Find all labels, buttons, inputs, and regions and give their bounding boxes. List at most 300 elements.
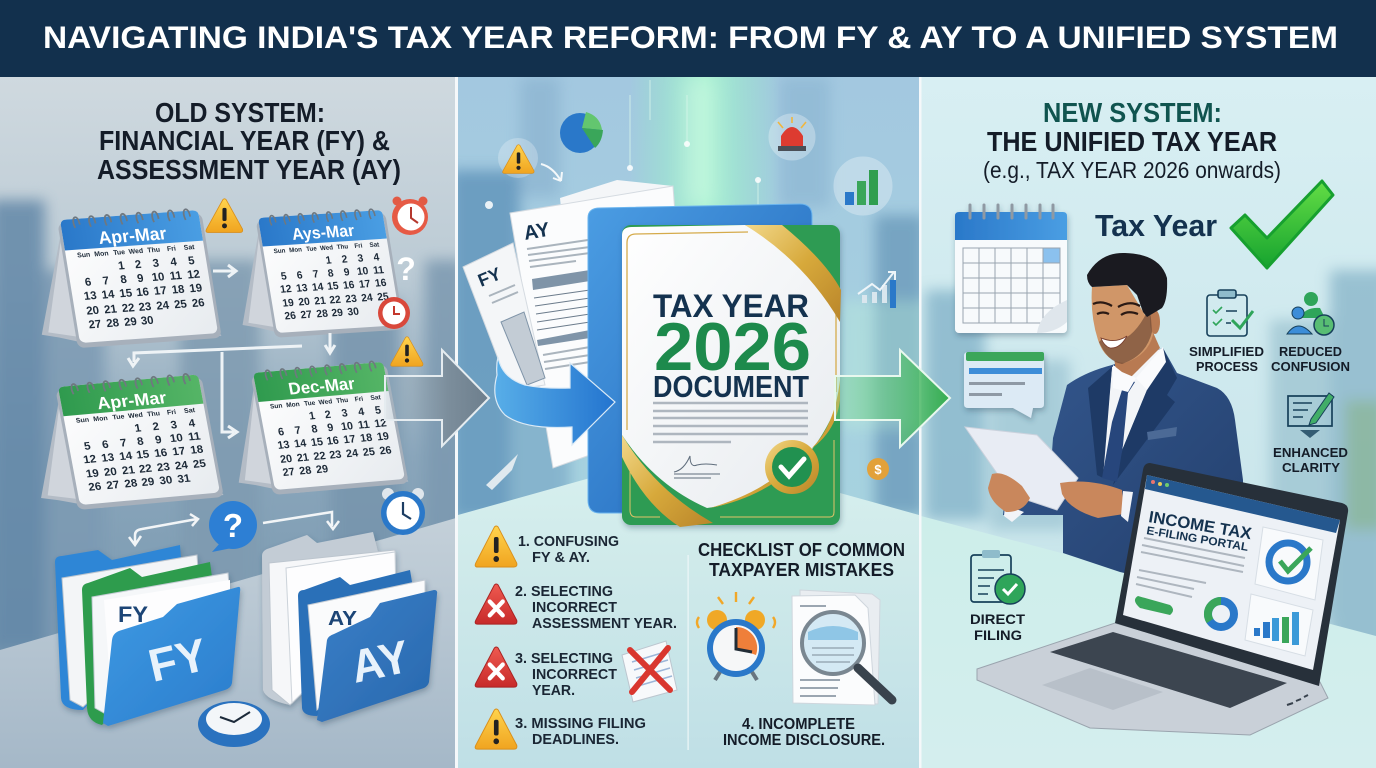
- calendar 4: Dec-Mar green: 12: [373, 417, 388, 430]
- label: reduced confusion: CONFUSION: [1271, 360, 1350, 374]
- label: enhanced clarity: [1273, 446, 1348, 475]
- person: face: [1092, 285, 1153, 363]
- title: NAVIGATING INDIA'S TAX YEAR REFORM: FROM FY & AY TO A UNIFIED SYSTEM: [43, 19, 1338, 55]
- calendar 4: Dec-Mar green: 4: [357, 406, 365, 418]
- laptop: browser bar: [1145, 475, 1340, 533]
- icon: warning 1: [475, 526, 517, 567]
- calendar 2: Ays-Mar blue: 4: [373, 252, 380, 264]
- item: incomplete income disclosure: 4. INCOMPLETE: [742, 716, 855, 733]
- calendar 1: Apr-Mar blue: 27: [88, 319, 102, 331]
- icon: small red clock: [378, 297, 410, 329]
- papers: AY sheet: AY: [522, 219, 552, 245]
- floating lights: [485, 141, 761, 209]
- calendar 3: Apr-Mar green: 26: [88, 481, 102, 494]
- calendar 4: Dec-Mar green: 28: [298, 465, 312, 478]
- heading: old system: ASSESSMENT YEAR (AY): [97, 154, 401, 185]
- laptop: donut chart: [1208, 601, 1234, 627]
- calendar 1: Apr-Mar blue: 8: [120, 274, 128, 286]
- calendar 4: Dec-Mar green: 25: [362, 446, 376, 459]
- laptop: screen bezel: [1115, 463, 1348, 686]
- document: gold ribbon top: [745, 225, 841, 322]
- document: green certificate with white sheet: [622, 225, 840, 525]
- calendar 4: Dec-Mar green: 29: [315, 463, 329, 476]
- panel: old system background: [0, 77, 465, 768]
- person: smile: [1101, 336, 1127, 348]
- item 2 text: INCORRECT: [532, 599, 617, 616]
- calendar 4: Dec-Mar green: 13: [277, 439, 291, 452]
- calendar 4: Dec-Mar green: Sat: [370, 394, 382, 402]
- calendar 3: Apr-Mar green: 14: [118, 450, 134, 463]
- icon: document with magnifier: [792, 590, 892, 705]
- icon: reduced confusion people: [1287, 292, 1334, 335]
- item 1 text: 1. CONFUSING: [518, 533, 619, 550]
- icon: alarm clock with bursts: [697, 592, 775, 680]
- calendar 4: Dec-Mar green: 11: [357, 419, 371, 432]
- label: direct filing: DIRECT: [970, 611, 1025, 627]
- person: beard: [1099, 305, 1152, 364]
- calendar 2: Ays-Mar blue: Mon: [289, 246, 303, 254]
- panel divider right: [919, 77, 922, 768]
- calendar 4: Dec-Mar green: 10: [340, 420, 354, 433]
- icon: warning triangle: [206, 199, 243, 232]
- calendar 1: Apr-Mar blue: 22: [121, 302, 136, 315]
- laptop: text lines: [1136, 538, 1245, 597]
- laptop: portal title: INCOME TAX: [1147, 508, 1253, 543]
- calendar 2: Ays-Mar blue: 28: [316, 309, 329, 320]
- icon: large green check: [1231, 181, 1333, 268]
- calendar 3: Apr-Mar green: Sun: [75, 417, 90, 425]
- calendar 4: Dec-Mar green: 16: [326, 435, 340, 448]
- calendar 3: Apr-Mar green: 5: [83, 441, 92, 453]
- calendar 1: Apr-Mar blue: Apr-Mar: [97, 223, 168, 248]
- calendar 3: Apr-Mar green: 1: [134, 423, 142, 435]
- calendar 1: Apr-Mar blue: 19: [189, 282, 203, 295]
- item: incomplete income disclosure: [723, 716, 885, 749]
- calendar 3: Apr-Mar green: 12: [82, 454, 97, 466]
- calendar 1: Apr-Mar blue: 14: [101, 289, 116, 302]
- heading: new system: THE UNIFIED TAX YEAR: [987, 126, 1277, 157]
- calendar 1: Apr-Mar blue: 15: [119, 287, 134, 300]
- label: Tax Year: Tax Year: [1095, 208, 1217, 243]
- document lines and signature: [653, 403, 808, 478]
- label: enhanced clarity: CLARITY: [1282, 461, 1341, 475]
- floating icon: coin: [867, 458, 889, 480]
- checklist divider: [688, 555, 689, 750]
- person: right cuff: [1121, 491, 1133, 522]
- document: blue folder: [588, 204, 812, 513]
- calendar 4: Dec-Mar green: 2: [324, 409, 332, 421]
- floating icon: siren bubble: [769, 114, 815, 160]
- calendar 2: Ays-Mar blue: 12: [279, 284, 293, 296]
- calendar 1: Apr-Mar blue: Sun: [77, 252, 91, 260]
- calendar 2: Ays-Mar blue: 9: [343, 267, 351, 279]
- calendar 1: Apr-Mar blue: 23: [138, 301, 152, 314]
- calendar 2: Ays-Mar blue: 15: [326, 281, 340, 293]
- item 2 text: 2. SELECTING: [515, 583, 613, 600]
- floating icon: bar chart bubble: [834, 157, 892, 215]
- calendar 1: Apr-Mar blue: 5: [187, 255, 196, 267]
- calendar 3: Apr-Mar green: 10: [169, 432, 184, 445]
- floating icon: white pen arrow: [486, 454, 518, 490]
- calendar 2: Ays-Mar blue: 30: [347, 307, 360, 318]
- document title: 2026: [654, 309, 811, 385]
- calendar 2: Ays-Mar blue: Tue: [306, 245, 318, 253]
- calendar 3: Apr-Mar green: [21, 373, 224, 513]
- floating icon: pie chart: [560, 112, 603, 153]
- arrow: green transition arrow: [835, 350, 950, 447]
- person: businessman: [965, 253, 1243, 600]
- calendar 3: Apr-Mar green: 6: [101, 439, 110, 451]
- calendar 1: Apr-Mar blue: 12: [186, 269, 201, 281]
- laptop: keyboard: [1050, 632, 1287, 708]
- arrows: small flow near folders: [129, 512, 339, 545]
- icon: blue alarm clock: [381, 488, 425, 535]
- person: eyes and brows: [1093, 302, 1140, 315]
- calendar 4: Dec-Mar green: Wed: [318, 398, 333, 406]
- calendar 2: Ays-Mar blue: 3: [357, 253, 365, 265]
- arrow: grey transition arrow: [385, 350, 489, 446]
- person: hair: [1087, 253, 1167, 317]
- floating icon: warning bubble: [498, 138, 538, 178]
- calendar 1: Apr-Mar blue: [23, 208, 222, 351]
- calendar 2: Ays-Mar blue: 27: [300, 310, 313, 321]
- calendar 1: Apr-Mar blue: 3: [152, 258, 160, 270]
- calendar 4: Dec-Mar green: 20: [279, 453, 293, 466]
- checklist heading: CHECKLIST OF COMMON: [698, 540, 905, 560]
- calendar 3: Apr-Mar green: Sat: [184, 407, 196, 415]
- calendar 1: Apr-Mar blue: 13: [83, 290, 98, 303]
- laptop: screen: [1123, 475, 1340, 670]
- calendar 3: Apr-Mar green: 15: [135, 449, 150, 461]
- calendar 4: Dec-Mar green: Sun: [270, 403, 283, 411]
- laptop: window dots: [1151, 480, 1169, 487]
- calendar 3: Apr-Mar green: Apr-Mar: [95, 388, 168, 413]
- item 4 text: [515, 715, 646, 748]
- icon: question bubble: [209, 501, 257, 552]
- calendar 1: Apr-Mar blue: Tue: [113, 249, 126, 257]
- calendar 1: Apr-Mar blue: Sat: [183, 244, 196, 252]
- calendar 1: Apr-Mar blue: 29: [123, 316, 138, 329]
- heading: new system: (e.g., TAX YEAR 2026 onwards): [983, 157, 1281, 183]
- calendar 2: Ays-Mar blue: 19: [282, 298, 295, 310]
- panel: new system background: [921, 77, 1376, 768]
- document title: DOCUMENT: [653, 369, 809, 404]
- calendar 3: Apr-Mar green: 3: [170, 419, 178, 432]
- calendar 2: Ays-Mar blue: 17: [358, 279, 372, 291]
- calendar 1: Apr-Mar blue: 11: [169, 270, 184, 283]
- checklist heading: TAXPAYER MISTAKES: [709, 560, 894, 580]
- calendar 3: Apr-Mar green: 21: [121, 464, 136, 477]
- calendar 4: Dec-Mar green: 1: [308, 410, 316, 423]
- calendar 2: Ays-Mar blue: 24: [361, 293, 374, 305]
- document: green check seal: [765, 440, 819, 494]
- icon: stopwatch disc: [198, 701, 270, 747]
- calendar 2: Ays-Mar blue: 11: [372, 265, 385, 277]
- calendar 2: Ays-Mar blue: 29: [331, 308, 344, 319]
- calendar 2: Ays-Mar blue: 22: [329, 295, 342, 307]
- calendar 2: Ays-Mar blue: 26: [284, 311, 297, 322]
- calendar 4: Dec-Mar green: 5: [374, 404, 382, 417]
- calendar 3: Apr-Mar green: 22: [138, 463, 153, 476]
- icon: direct filing clipboard: [971, 550, 1025, 604]
- calendar 2: Ays-Mar blue: [225, 208, 404, 340]
- calendar 4: Dec-Mar green: [218, 360, 409, 498]
- calendar 1: Apr-Mar blue: 28: [106, 317, 120, 330]
- icon: warning 4: [475, 709, 517, 749]
- item 1 text: [518, 533, 619, 566]
- item 1 text: FY & AY.: [532, 549, 590, 566]
- calendar 2: Ays-Mar blue: 20: [298, 297, 311, 309]
- heading: old system: [97, 97, 401, 185]
- laptop: bar chart card: [1245, 594, 1313, 656]
- calendar 3: Apr-Mar green: Mon: [93, 415, 108, 423]
- calendar 4: Dec-Mar green: 23: [328, 449, 343, 462]
- checklist heading: [698, 540, 905, 580]
- laptop: [977, 463, 1348, 735]
- calendar 1: Apr-Mar blue: 17: [153, 285, 168, 298]
- floating icon: coin: $: [874, 462, 882, 477]
- icon: question bubble: ?: [223, 507, 243, 544]
- icon: speech bubble: [964, 352, 1044, 418]
- calendar 1: Apr-Mar blue: 9: [136, 273, 145, 285]
- laptop: portal title: E-FILING PORTAL: [1146, 525, 1249, 554]
- item 3 text: YEAR.: [532, 682, 575, 699]
- papers: AY sheet: [510, 186, 690, 468]
- calendar 4: Dec-Mar green: Thu: [336, 397, 349, 405]
- calendar 4: Dec-Mar green: 27: [282, 466, 296, 479]
- calendar 1: Apr-Mar blue: 16: [135, 286, 150, 299]
- document: gold ribbon right: [710, 380, 840, 508]
- icon: enhanced clarity: [1288, 393, 1334, 438]
- person: neck: [1113, 330, 1160, 378]
- calendar 3: Apr-Mar green: 27: [106, 479, 120, 492]
- calendar 3: Apr-Mar green: 4: [188, 418, 197, 430]
- calendar 1: Apr-Mar blue: 20: [86, 305, 100, 318]
- calendar 1: Apr-Mar blue: 6: [84, 276, 92, 289]
- mistakes: list: [475, 526, 677, 749]
- label: reduced confusion: REDUCED: [1279, 345, 1342, 359]
- icon: simplified process clipboard: [1207, 290, 1253, 336]
- calendar 2: Ays-Mar blue: 1: [325, 255, 333, 267]
- calendar 1: Apr-Mar blue: 21: [103, 303, 118, 316]
- calendar 3: Apr-Mar green: 25: [192, 458, 207, 471]
- person: suit: [1003, 348, 1243, 600]
- item 3 text: 3. SELECTING: [515, 650, 613, 667]
- calendar 1: Apr-Mar blue: 10: [151, 271, 165, 284]
- calendar 1: Apr-Mar blue: 1: [117, 260, 126, 273]
- calendar 3: Apr-Mar green: 23: [156, 461, 171, 474]
- calendar 4: Dec-Mar green: 24: [345, 447, 359, 460]
- person: tie: [1102, 377, 1135, 482]
- calendar 3: Apr-Mar green: Thu: [147, 410, 161, 418]
- calendar 3: Apr-Mar green: 9: [154, 434, 163, 446]
- item 4 text: 3. MISSING FILING: [515, 715, 646, 732]
- calendar 1: Apr-Mar blue: Wed: [128, 248, 144, 256]
- calendar 3: Apr-Mar green: 11: [187, 431, 202, 443]
- calendar 1: Apr-Mar blue: 24: [156, 300, 171, 313]
- item 3 text: [515, 650, 617, 699]
- person: papers: [965, 427, 1078, 510]
- calendar 3: Apr-Mar green: 2: [152, 421, 160, 433]
- laptop: check card: [1255, 527, 1323, 600]
- folder: FY: [55, 545, 240, 726]
- calendar 4: Dec-Mar green: 14: [293, 437, 307, 450]
- folder: AY: AY: [328, 608, 358, 630]
- panel: transition background: [450, 77, 950, 768]
- calendar 1: Apr-Mar blue: 18: [171, 284, 185, 297]
- calendar 3: Apr-Mar green: 17: [171, 446, 186, 458]
- arrow: blue curved arrow: [495, 357, 615, 445]
- calendar 3: Apr-Mar green: Tue: [112, 414, 125, 421]
- calendar 2: Ays-Mar blue: 2: [341, 254, 349, 266]
- papers: FY sheet: [463, 243, 545, 390]
- calendar 1: Apr-Mar blue: 25: [173, 298, 188, 311]
- person: collar: [1113, 347, 1166, 392]
- laptop: base: [977, 623, 1328, 735]
- label: enhanced clarity: ENHANCED: [1273, 446, 1348, 460]
- calendar 3: Apr-Mar green: 24: [174, 460, 190, 472]
- calendar 3: Apr-Mar green: 28: [124, 478, 138, 490]
- document title: [653, 288, 811, 404]
- document title: TAX YEAR: [653, 288, 809, 324]
- calendar 1: Apr-Mar blue: 4: [170, 256, 178, 269]
- heading: old system: OLD SYSTEM:: [155, 97, 325, 128]
- calendar 4: Dec-Mar green: 9: [326, 422, 334, 434]
- person: left hand: [988, 473, 1030, 512]
- calendar 1: Apr-Mar blue: 30: [140, 315, 155, 328]
- calendar 2: Ays-Mar blue: Sat: [369, 241, 381, 249]
- panel divider left: [455, 77, 458, 768]
- calendar 4: Dec-Mar green: Fri: [354, 396, 364, 403]
- calendar 4: Dec-Mar green: 22: [313, 450, 327, 463]
- person: right lapel: [1113, 348, 1177, 485]
- header band: [0, 0, 1376, 77]
- calendar 2: Ays-Mar blue: 16: [342, 280, 356, 292]
- label: reduced confusion: [1271, 345, 1350, 374]
- calendar 4: Dec-Mar green: 8: [310, 423, 319, 436]
- calendar 4: Dec-Mar green: 3: [341, 407, 349, 420]
- calendar 3: Apr-Mar green: 18: [189, 444, 204, 457]
- laptop: green button: [1135, 596, 1173, 615]
- item 2 text: [515, 583, 677, 632]
- calendar 2: Ays-Mar blue: Sun: [273, 247, 286, 255]
- calendar 2: Ays-Mar blue: 13: [295, 283, 309, 295]
- label: simplified process: PROCESS: [1196, 360, 1258, 374]
- papers: AY sheet back: [560, 180, 673, 300]
- arrow: small curved white: [541, 164, 562, 181]
- calendar 3: Apr-Mar green: 16: [153, 447, 168, 460]
- label: simplified process: [1189, 345, 1264, 374]
- item 4 text: DEADLINES.: [532, 731, 619, 748]
- calendar 3: Apr-Mar green: Fri: [167, 409, 177, 417]
- calendar 2: Ays-Mar blue: Wed: [320, 244, 334, 252]
- calendar 3: Apr-Mar green: 29: [141, 476, 155, 489]
- folder: FY: FY: [118, 602, 148, 627]
- calendar 2: Ays-Mar blue: 10: [356, 266, 369, 278]
- icon: question mark: ?: [396, 251, 416, 287]
- floating icon: mini growth chart: [858, 272, 896, 308]
- laptop: trackpad: [1042, 668, 1163, 710]
- calendar 2: Ays-Mar blue: 8: [327, 268, 335, 280]
- calendar 4: Dec-Mar green: Dec-Mar: [287, 374, 357, 399]
- calendar 3: Apr-Mar green: 20: [103, 466, 118, 479]
- arrows: flow between calendars: [128, 265, 335, 438]
- heading: new system: [983, 97, 1281, 183]
- calendar 4: Dec-Mar green: 26: [379, 444, 393, 457]
- calendar 2: Ays-Mar blue: 6: [296, 270, 304, 282]
- icon: red x 2: [475, 584, 517, 624]
- person: left lapel: [1088, 367, 1112, 478]
- calendar 4: Dec-Mar green: 19: [376, 430, 390, 443]
- person: ear: [1150, 310, 1160, 334]
- calendar 3: Apr-Mar green: 30: [159, 475, 173, 487]
- person: pocket: [1147, 427, 1177, 440]
- calendar 2: Ays-Mar blue: Ays-Mar: [290, 222, 356, 244]
- calendar 4: Dec-Mar green: Tue: [304, 400, 316, 408]
- folder: AY: AY: [346, 630, 414, 693]
- icon: wall calendar: [955, 205, 1067, 333]
- icon: red alarm clock: [392, 196, 428, 235]
- calendar 3: Apr-Mar green: 7: [119, 437, 128, 450]
- calendar 2: Ays-Mar blue: 16: [374, 278, 388, 290]
- laptop: ports: [1287, 695, 1308, 705]
- calendar 1: Apr-Mar blue: Mon: [94, 250, 109, 258]
- label: simplified process: SIMPLIFIED: [1189, 345, 1264, 359]
- person: right hand: [1060, 482, 1124, 518]
- heading: old system: FINANCIAL YEAR (FY) &: [99, 125, 390, 156]
- person: left cuff: [1004, 505, 1024, 522]
- person: shirt: [1102, 348, 1167, 478]
- item 2 text: ASSESSMENT YEAR.: [532, 615, 677, 632]
- icon: red x 3: [475, 647, 517, 687]
- calendar 2: Ays-Mar blue: Thu: [336, 243, 349, 251]
- calendar 4: Dec-Mar green: Mon: [286, 401, 300, 409]
- calendar 2: Ays-Mar blue: 25: [376, 292, 390, 304]
- item 3 text: INCORRECT: [532, 666, 617, 683]
- calendar 1: Apr-Mar blue: Fri: [167, 246, 177, 253]
- calendar 4: Dec-Mar green: 21: [296, 452, 310, 464]
- calendar 2: Ays-Mar blue: 7: [312, 269, 320, 281]
- calendar 4: Dec-Mar green: 17: [342, 433, 357, 446]
- calendar 4: Dec-Mar green: 15: [310, 436, 324, 449]
- calendar 2: Ays-Mar blue: Fri: [354, 242, 363, 250]
- calendar 4: Dec-Mar green: 7: [294, 425, 302, 437]
- calendar 1: Apr-Mar blue: 7: [102, 275, 110, 288]
- calendar 3: Apr-Mar green: 19: [85, 468, 100, 480]
- heading: new system: NEW SYSTEM:: [1043, 97, 1222, 128]
- calendar 2: Ays-Mar blue: 14: [311, 282, 325, 294]
- calendar 2: Ays-Mar blue: 21: [314, 296, 327, 308]
- calendar 3: Apr-Mar green: 31: [177, 473, 191, 486]
- calendar 4: Dec-Mar green: 18: [359, 432, 373, 445]
- calendar 1: Apr-Mar blue: 2: [134, 259, 142, 271]
- folder: AY: [262, 532, 437, 722]
- item: incomplete income disclosure: INCOME DISCLOSURE.: [723, 732, 885, 749]
- calendar 3: Apr-Mar green: 8: [136, 436, 145, 448]
- calendar 3: Apr-Mar green: Wed: [128, 412, 144, 420]
- label: direct filing: [970, 611, 1025, 643]
- folder: FY: FY: [144, 628, 212, 692]
- calendar 2: Ays-Mar blue: 23: [345, 294, 358, 306]
- document: gold ribbon bottom: [622, 435, 713, 527]
- icon: warning triangle lower: [391, 337, 423, 366]
- icon: crossed paper: [622, 641, 677, 702]
- label: direct filing: FILING: [974, 627, 1022, 643]
- calendar 1: Apr-Mar blue: 26: [191, 297, 206, 310]
- papers: FY sheet: FY: [475, 264, 504, 291]
- calendar 3: Apr-Mar green: 13: [100, 452, 115, 465]
- calendar 4: Dec-Mar green: 6: [277, 426, 285, 438]
